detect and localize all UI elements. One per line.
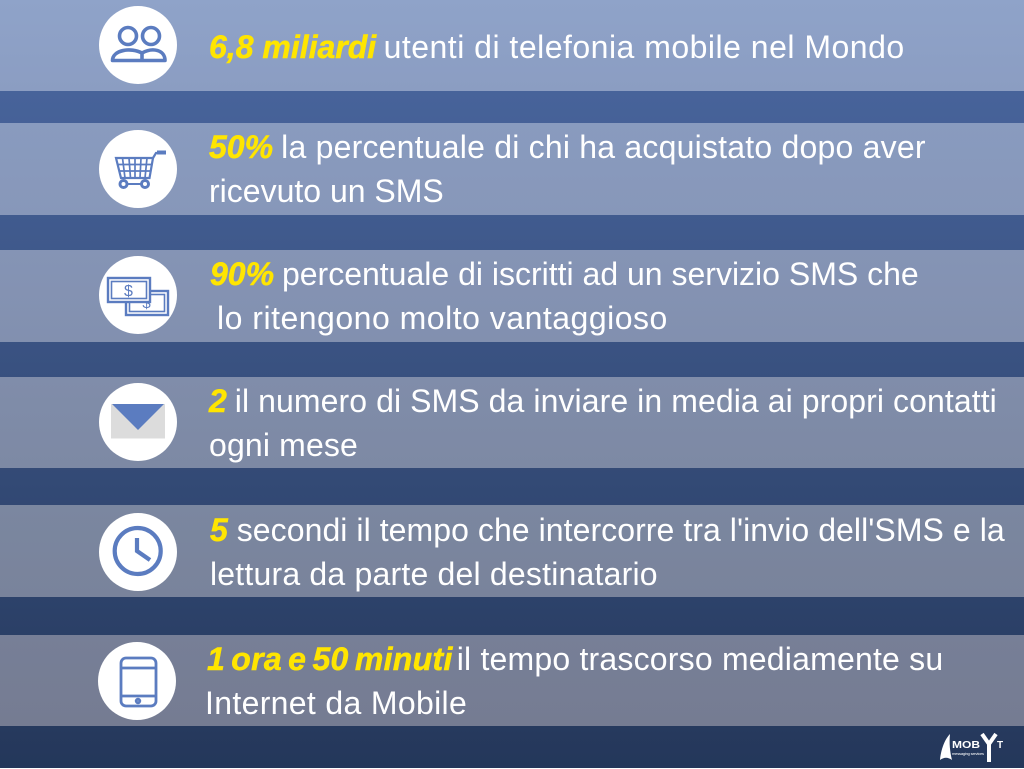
text: Internet da Mobile: Internet da Mobile	[205, 685, 467, 721]
text: 2 il numero: 2 il numero di SMS da inviare in media ai propri contatti	[209, 383, 997, 419]
icon: people	[99, 6, 177, 84]
logo: Mobyt	[940, 732, 1003, 762]
icon: banknotes: $	[124, 283, 133, 300]
band 6	[0, 635, 1024, 726]
band 2	[0, 123, 1024, 215]
text: 6,8 miliardi: 6,8 miliardi utenti di telefonia mobile nel Mondo	[209, 29, 905, 65]
text: 5 secondi: 5 secondi il tempo che intercorre tra l'invio dell'SMS e la	[210, 512, 1005, 548]
text: 1 ora e 50 minuti: 1 ora e 50 minuti il tempo trascorso mediamente su	[207, 641, 943, 677]
band 4	[0, 377, 1024, 468]
logo: Mobyt: T	[997, 740, 1003, 751]
text: lettura: lettura da parte del destinatario	[210, 556, 658, 592]
text: ogni mese: ogni mese	[209, 427, 358, 463]
text: lo ritengono: lo ritengono molto vantaggioso	[217, 300, 668, 336]
band 5	[0, 505, 1024, 597]
icon: tablet	[98, 642, 176, 720]
text: ricevuto un SMS: ricevuto un SMS	[209, 173, 444, 209]
text: 90%: 90% percentuale di iscritti ad un servizio SMS che	[210, 256, 919, 292]
logo: Mobyt: messaging services	[952, 751, 984, 756]
band 1	[0, 0, 1024, 91]
icon: shopping cart	[99, 130, 177, 208]
icon: banknotes: $	[142, 295, 151, 312]
icon: banknotes	[99, 256, 177, 334]
icon: envelope	[99, 383, 177, 461]
band 3	[0, 250, 1024, 342]
text: 50%: 50% la percentuale di chi ha acquistato dopo aver	[209, 129, 926, 165]
logo: Mobyt: MOB	[952, 740, 980, 751]
icon: clock	[99, 513, 177, 591]
